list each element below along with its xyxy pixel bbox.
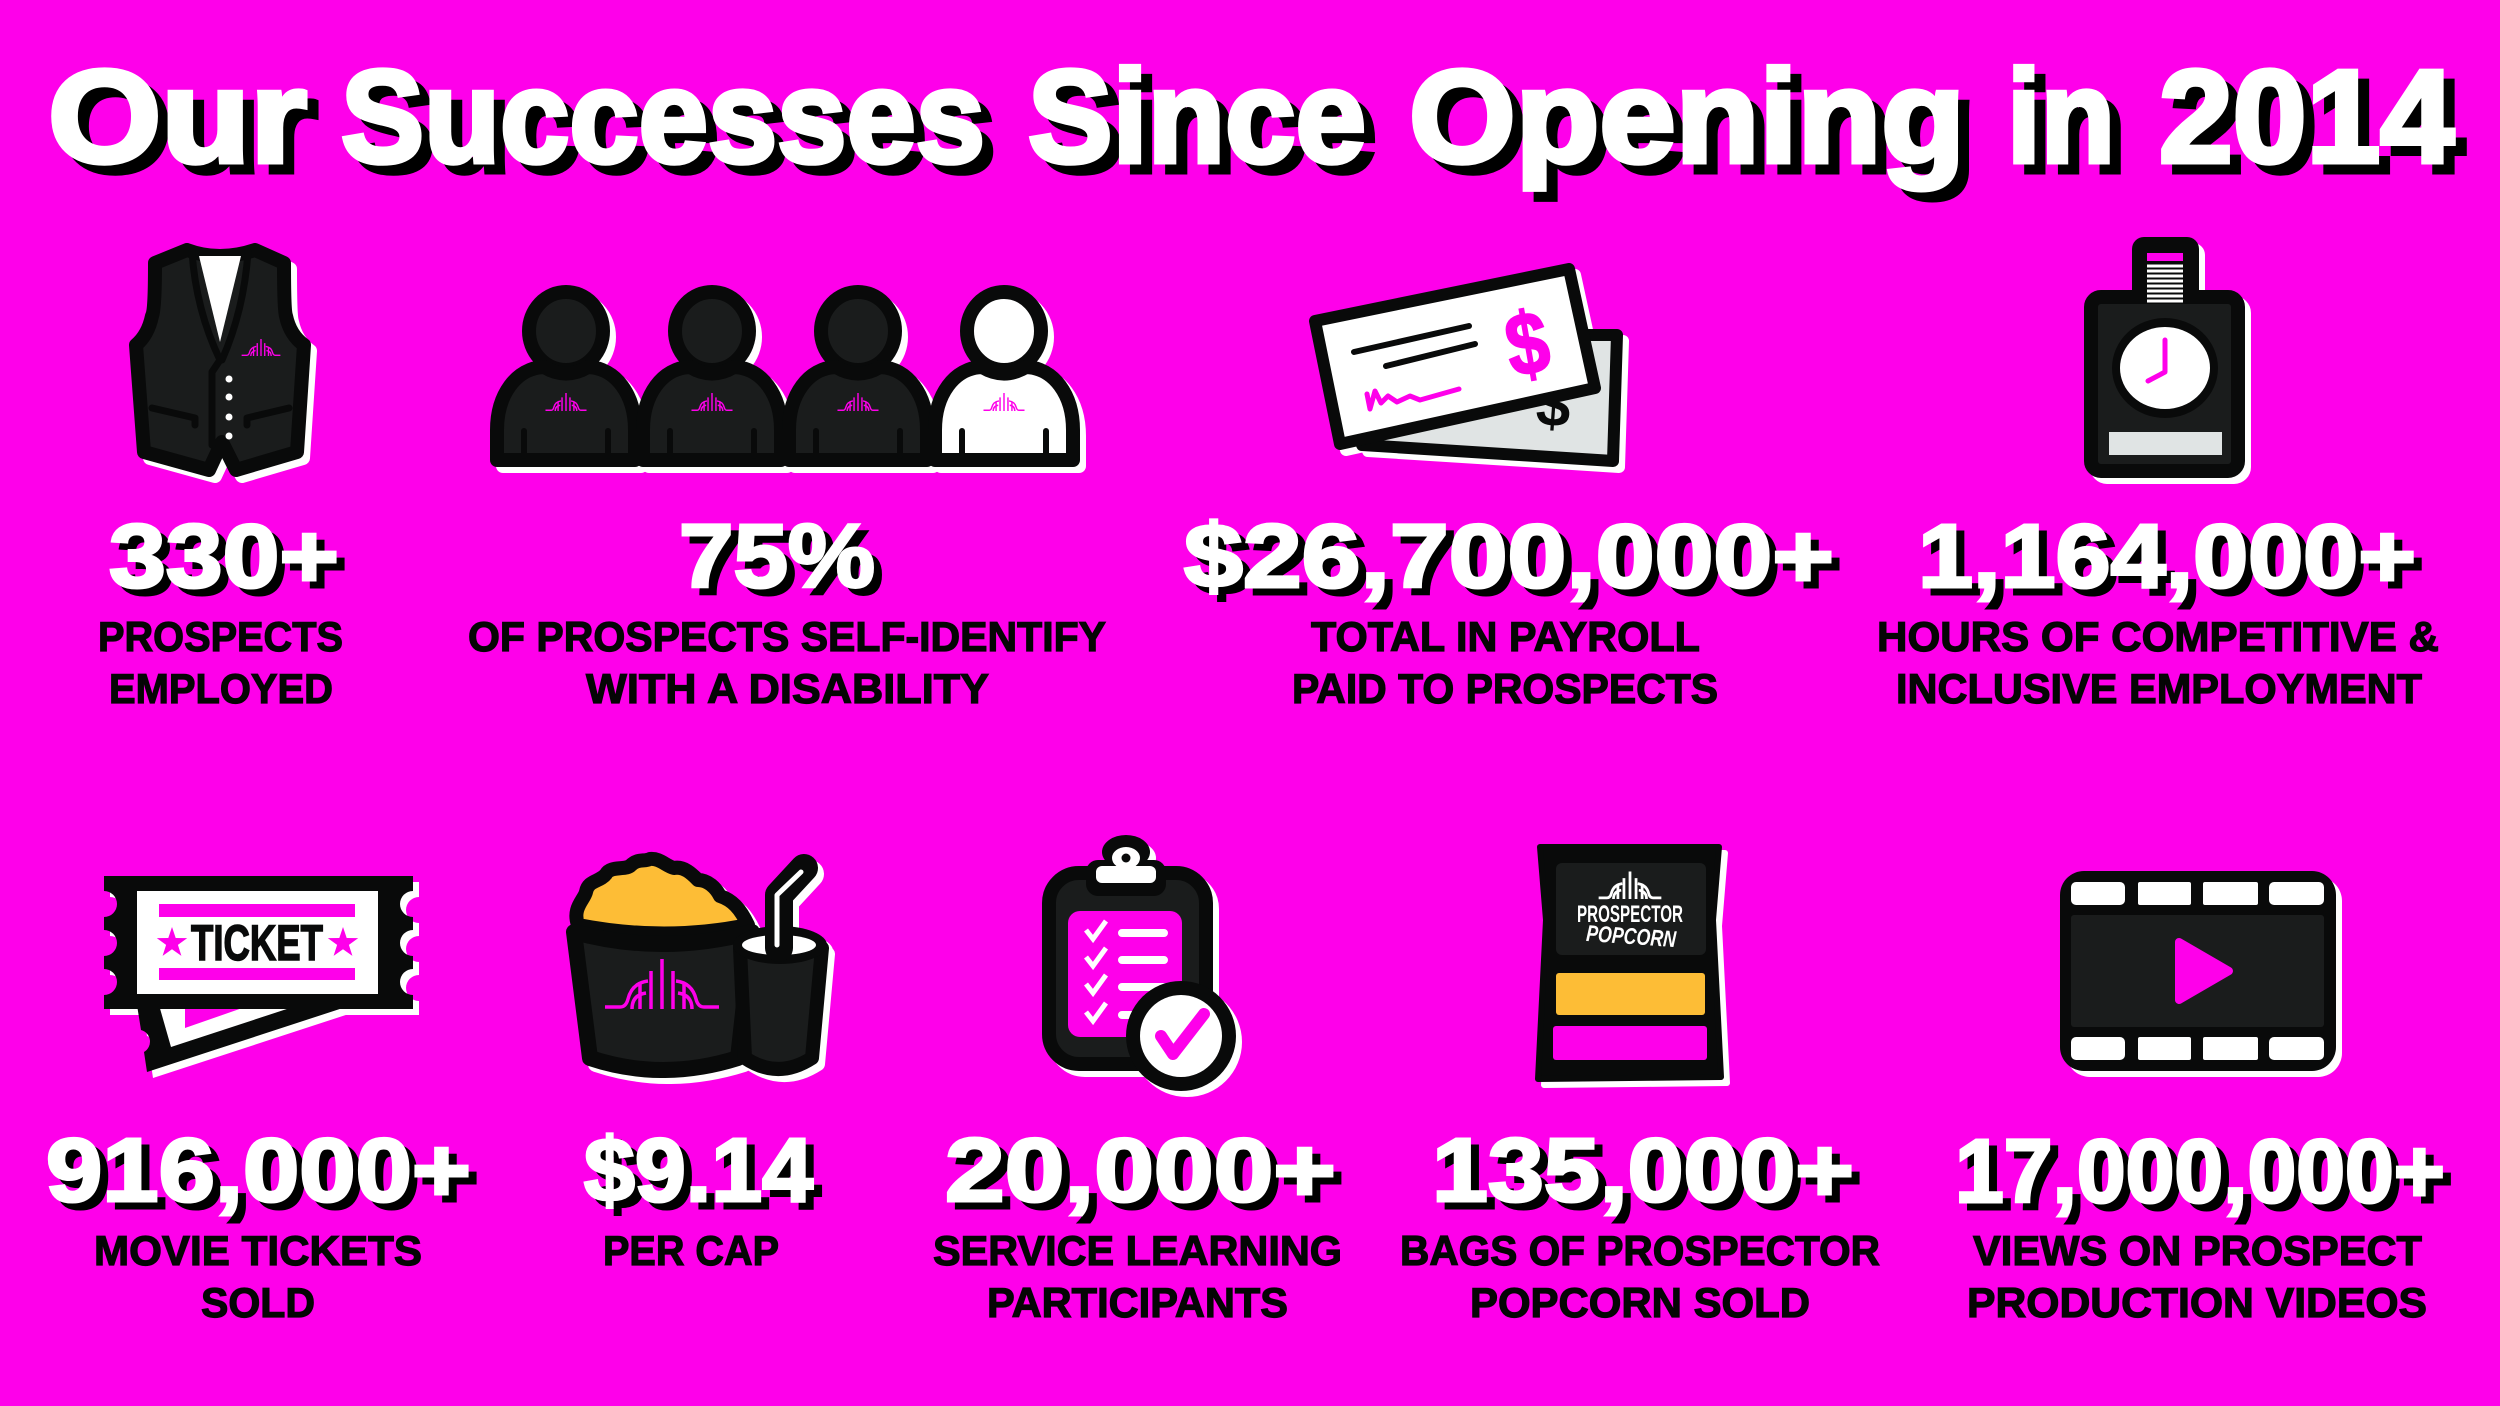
title: Our bbox=[48, 43, 307, 190]
label: video views: VIEWS ON PROSPECT bbox=[1973, 1227, 2422, 1274]
icon: clipboard with check badge bbox=[1049, 835, 1236, 1091]
label: prospects employed: PROSPECTS bbox=[98, 613, 343, 660]
label: service learning participants: PARTICIPANTS bbox=[987, 1279, 1288, 1326]
title: Since bbox=[1028, 43, 1366, 190]
icon: four hooded figures bbox=[497, 292, 1073, 460]
label: self-identify: OF PROSPECTS SELF-IDENTIFY bbox=[468, 613, 1106, 660]
label: self-identify bbox=[468, 613, 1106, 712]
title bbox=[48, 43, 2454, 190]
label: movie tickets sold: SOLD bbox=[201, 1279, 315, 1326]
number: 330+: 330+ bbox=[109, 507, 339, 607]
panel: per cap bbox=[574, 859, 827, 1274]
number: 135,000+: 135,000+ bbox=[1432, 1121, 1854, 1221]
label: hours: HOURS OF COMPETITIVE & bbox=[1877, 613, 2439, 660]
label: service learning participants: SERVICE LEARNING bbox=[933, 1227, 1342, 1274]
panel: video views bbox=[1955, 871, 2445, 1326]
icon: popcorn bag bbox=[1538, 847, 1721, 1079]
icon: paychecks: $ bbox=[1534, 370, 1573, 441]
icon: popcorn bag: PROSPECTOR bbox=[1577, 901, 1683, 928]
label: video views: PRODUCTION VIDEOS bbox=[1967, 1279, 2427, 1326]
title: Successes bbox=[341, 43, 985, 190]
label: movie tickets sold: MOVIE TICKETS bbox=[94, 1227, 422, 1274]
number: 20,000+: 20,000+ bbox=[945, 1121, 1336, 1221]
label: bags sold bbox=[1400, 1227, 1880, 1326]
number: $26,700,000+: $26,700,000+ bbox=[1184, 507, 1834, 607]
label: total in payroll: TOTAL IN PAYROLL bbox=[1311, 613, 1700, 660]
label: hours: INCLUSIVE EMPLOYMENT bbox=[1896, 665, 2422, 712]
label: per cap: PER CAP bbox=[603, 1227, 779, 1274]
panel: self-identify with a disability bbox=[468, 292, 1106, 712]
panel: hours of employment bbox=[1877, 237, 2439, 712]
icon: time clock bbox=[2091, 237, 2238, 471]
icon: paychecks: $ bbox=[1498, 291, 1557, 396]
label: video views bbox=[1967, 1227, 2427, 1326]
number: 17,000,000+: 17,000,000+ bbox=[1955, 1122, 2445, 1222]
label: prospects employed: EMPLOYED bbox=[109, 665, 333, 712]
icon: popcorn and drink bbox=[574, 859, 827, 1070]
title: Opening bbox=[1409, 43, 1965, 190]
icon: popcorn bag: POPCORN bbox=[1585, 920, 1677, 952]
panel: service learning bbox=[933, 835, 1342, 1326]
icon: vest bbox=[136, 250, 304, 470]
icon: tickets bbox=[104, 876, 413, 1072]
title: 2014 bbox=[2159, 43, 2454, 190]
icon: film strip with play button bbox=[2060, 871, 2336, 1071]
label: total in payroll: PAID TO PROSPECTS bbox=[1292, 665, 1718, 712]
label: bags sold: BAGS OF PROSPECTOR bbox=[1400, 1227, 1880, 1274]
panel: movie tickets bbox=[46, 876, 471, 1326]
icon: tickets: TICKET bbox=[191, 915, 323, 971]
title: in bbox=[2007, 43, 2115, 190]
label: self-identify: WITH A DISABILITY bbox=[586, 665, 989, 712]
label: total in payroll bbox=[1292, 613, 1718, 712]
label: bags sold: POPCORN SOLD bbox=[1470, 1279, 1810, 1326]
panel: prospects employed bbox=[98, 250, 343, 712]
number: 75%: 75% bbox=[679, 507, 875, 607]
label: service learning participants bbox=[933, 1227, 1342, 1326]
icon: paychecks bbox=[1315, 269, 1617, 461]
label: hours bbox=[1877, 613, 2439, 712]
label: movie tickets sold bbox=[94, 1227, 422, 1326]
panel: payroll bbox=[1184, 269, 1834, 712]
number: 1,164,000+: 1,164,000+ bbox=[1918, 507, 2416, 607]
panel: popcorn bags bbox=[1400, 847, 1880, 1326]
number: $9.14: $9.14 bbox=[584, 1121, 813, 1221]
number: 916,000+: 916,000+ bbox=[46, 1121, 471, 1221]
label: prospects employed bbox=[98, 613, 343, 712]
